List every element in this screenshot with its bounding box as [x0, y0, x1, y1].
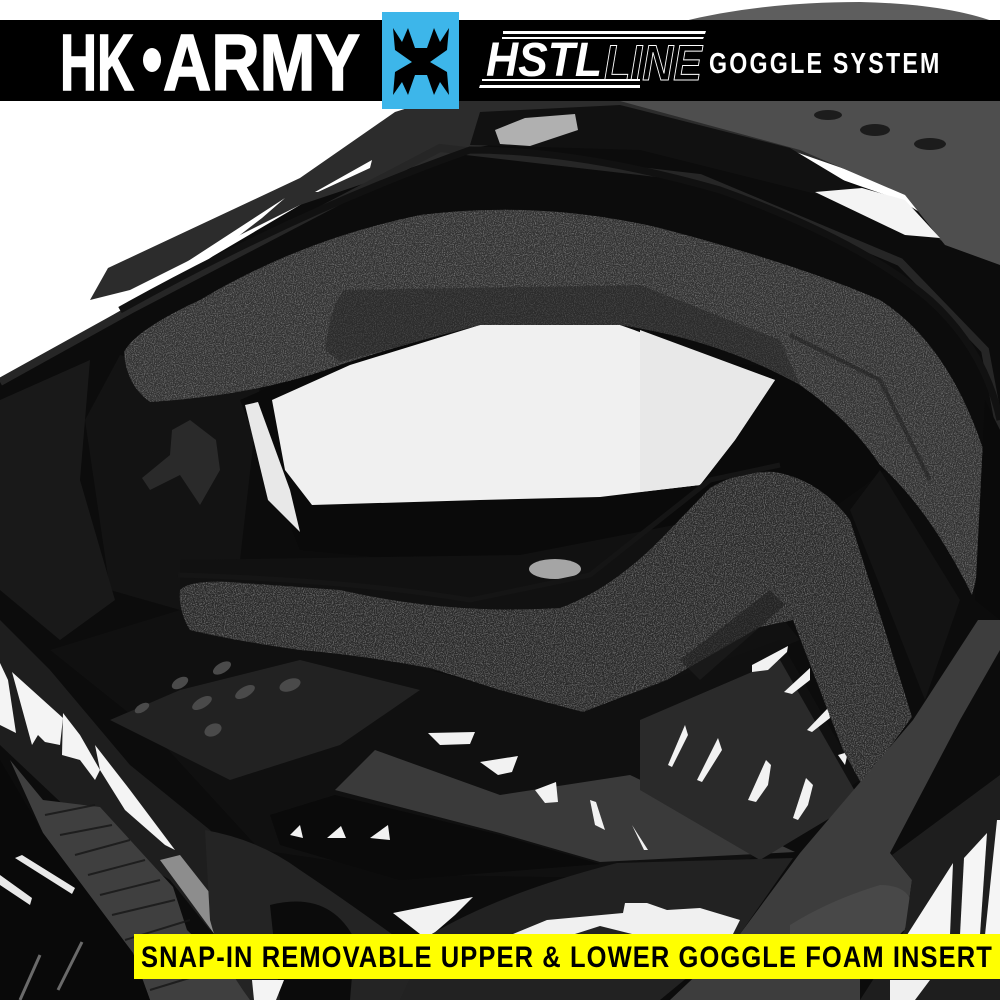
white vent holes: [290, 646, 848, 934]
velcro pad: [205, 830, 420, 1000]
logo: HSTL Line: HSTL: [486, 34, 602, 87]
logo: HSTL Line: [479, 31, 706, 91]
lower tray interior: [180, 520, 800, 700]
lens area dark frame: [240, 330, 900, 570]
logo: HK Army wordmark: ARMY: [163, 18, 360, 107]
right dark edge: [975, 400, 1000, 620]
header banner: [0, 12, 1000, 109]
right strap: [860, 775, 1000, 1000]
lens bright: [272, 325, 775, 505]
top dome of mask behind banner: [680, 2, 1000, 110]
snap lower: [529, 559, 581, 579]
visor inner opening: [470, 105, 860, 195]
left strap: [0, 620, 250, 930]
logo: blue square mark: [382, 12, 459, 109]
lower inner mask floor: [50, 610, 860, 880]
upper visor plate: [90, 101, 1000, 300]
logo: HK Army wordmark: HK: [60, 18, 134, 107]
bottom centre strap: [400, 858, 793, 1000]
small vent pockets: [133, 659, 302, 739]
visor vents: [814, 110, 946, 150]
black bar: [0, 20, 1000, 101]
right pillar: [670, 620, 1000, 1000]
foam ridges: [325, 285, 800, 385]
white gaps in visor: [182, 160, 372, 265]
grey ribs: [335, 750, 795, 862]
snap fastener: [495, 114, 578, 146]
caption bar: SNAP-IN REMOVABLE UPPER & LOWER GOGGLE FOAM INSERT: [141, 940, 992, 973]
foam lower ridge: [680, 590, 785, 680]
frame rim: [0, 148, 1000, 430]
logo: HK Army wordmark: [60, 18, 360, 107]
frame arc right: [120, 150, 1000, 420]
visor brim right: [620, 101, 1000, 265]
knob on frame: [142, 420, 220, 505]
label: goggle system: GOGGLE SYSTEM: [709, 46, 939, 80]
strap lettering centre: [513, 903, 740, 934]
interior side wall: [85, 355, 260, 610]
buckle: [160, 855, 235, 935]
lower foam: [180, 472, 912, 785]
bottom left panel: [0, 760, 150, 1000]
lens tint right: [640, 330, 775, 492]
upper foam: [124, 210, 986, 595]
webbing strap: [10, 760, 250, 1000]
strap lettering: [0, 663, 175, 850]
logo: HSTL Line: LINE: [604, 35, 703, 91]
